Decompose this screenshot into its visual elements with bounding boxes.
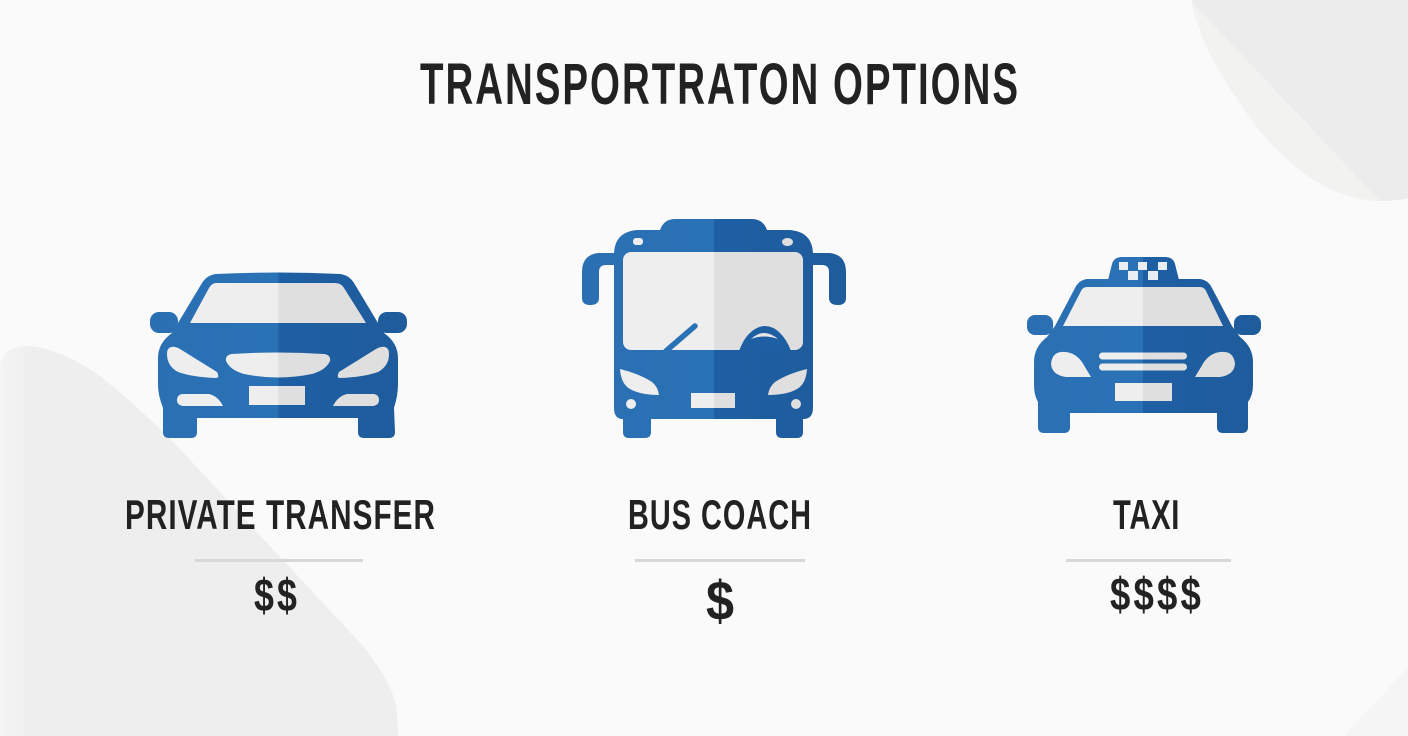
divider: taxi bbox=[1066, 559, 1231, 562]
car windshield bbox=[190, 283, 366, 323]
taxi roof sign bbox=[1108, 257, 1179, 280]
taxi windshield bbox=[1063, 287, 1223, 326]
divider: private transfer bbox=[195, 559, 363, 562]
bus lights and plate bbox=[620, 238, 807, 409]
background shape: bottom right bbox=[1344, 667, 1408, 736]
car body bbox=[158, 272, 398, 438]
column: private transfer bbox=[125, 272, 436, 621]
divider: bus coach bbox=[635, 559, 805, 562]
bus body bbox=[614, 219, 813, 438]
background shape: bottom left bbox=[0, 346, 398, 736]
label: private transfer: PRIVATE TRANSFER bbox=[125, 491, 436, 538]
taxi mirrors bbox=[1027, 315, 1261, 335]
label: bus coach: BUS COACH bbox=[628, 491, 812, 538]
title: TRANSPORTRATON OPTIONS bbox=[420, 52, 1020, 117]
icon: taxi bbox=[1027, 257, 1261, 433]
taxi checker pattern bbox=[1119, 262, 1167, 280]
car lights, grille and plate bbox=[167, 347, 389, 406]
price: taxi: $$$$ bbox=[1110, 568, 1204, 620]
icon: bus bbox=[582, 219, 846, 438]
bus steering wheel bbox=[739, 326, 791, 351]
background shape: top right bbox=[1191, 0, 1408, 201]
bus wiper bbox=[666, 326, 695, 351]
column: bus coach bbox=[582, 219, 846, 632]
price: private transfer: $$ bbox=[254, 569, 300, 621]
bus mirrors bbox=[582, 253, 846, 305]
column: taxi bbox=[1027, 257, 1261, 620]
label: taxi: TAXI bbox=[1113, 491, 1180, 538]
price: bus coach: $ bbox=[706, 569, 734, 632]
taxi body bbox=[1034, 279, 1253, 433]
taxi lights, grille and plate bbox=[1051, 352, 1235, 401]
icon: private car bbox=[150, 272, 407, 438]
bus windshield bbox=[623, 252, 803, 350]
car mirrors bbox=[150, 312, 407, 333]
